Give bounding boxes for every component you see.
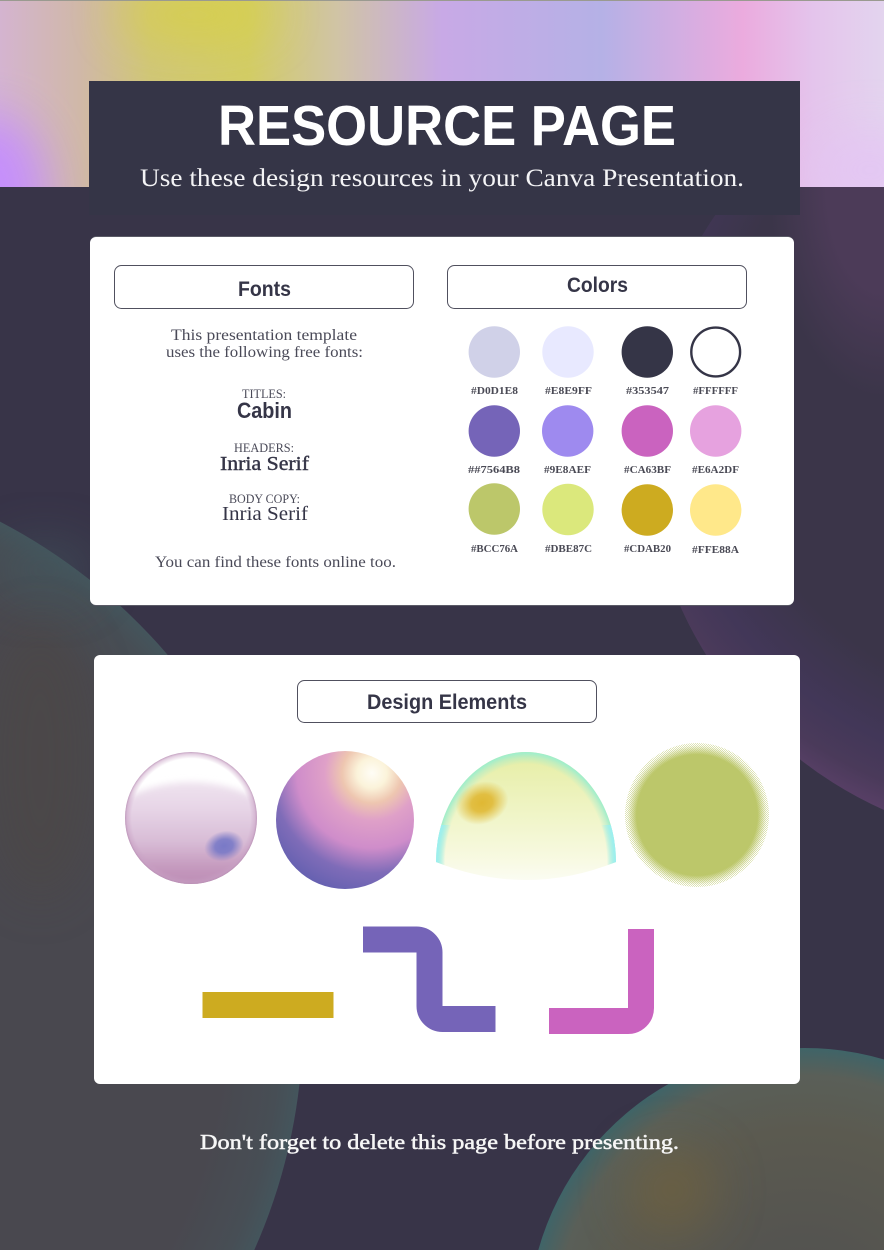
headers font bbox=[220, 441, 309, 475]
swatch: D0D1E8: #D0D1E8 bbox=[471, 385, 519, 397]
panel: fonts and colors bbox=[90, 236, 794, 606]
gradient banner bbox=[0, 0, 884, 187]
swatch: 7564B8 bbox=[468, 405, 521, 476]
background bubble: right purple bbox=[645, 74, 884, 810]
body copy font bbox=[222, 492, 308, 525]
titles font: TITLES: bbox=[242, 387, 286, 401]
swatch: FFFFFF: #FFFFFF bbox=[693, 385, 738, 397]
swatch: E6A2DF bbox=[690, 405, 741, 476]
swatch: BCC76A bbox=[469, 483, 520, 555]
design elements heading box bbox=[298, 680, 596, 722]
colors heading box bbox=[448, 266, 746, 308]
header block bbox=[89, 81, 800, 215]
body copy font: Inria Serif bbox=[222, 503, 308, 525]
background bubble: bottom right bbox=[538, 1048, 884, 1250]
swatch: 9E8AEF: #9E8AEF bbox=[544, 464, 591, 476]
swatch: E6A2DF: #E6A2DF bbox=[692, 464, 739, 476]
swatch: BCC76A: #BCC76A bbox=[471, 543, 518, 555]
fonts heading box bbox=[114, 266, 414, 308]
headers font: HEADERS: bbox=[234, 441, 294, 455]
swatch: CDAB20: #CDAB20 bbox=[624, 543, 671, 555]
element: purple zigzag line bbox=[363, 940, 496, 1019]
element: iridescent sphere bbox=[276, 751, 414, 889]
panel: design elements bbox=[91, 655, 800, 1084]
titles font: Cabin bbox=[237, 398, 292, 423]
titles font bbox=[237, 387, 292, 423]
swatch: FFFFFF bbox=[691, 328, 740, 397]
panel: colors bbox=[448, 266, 746, 556]
title: RESOURCE PAGE bbox=[218, 94, 676, 158]
swatch: CA63BF: #CA63BF bbox=[624, 464, 671, 476]
background bubble: left teal bbox=[0, 522, 303, 1250]
colors heading box: Colors bbox=[567, 274, 628, 297]
swatch: D0D1E8 bbox=[469, 326, 520, 397]
swatch: CA63BF bbox=[622, 405, 673, 476]
swatch: 7564B8: ##7564B8 bbox=[468, 464, 521, 476]
swatch: 353547: #353547 bbox=[626, 385, 670, 397]
footer note: Don't forget to delete this page before presenting. bbox=[200, 1130, 679, 1154]
element: pink corner line bbox=[549, 929, 641, 1021]
swatch: 9E8AEF bbox=[542, 405, 593, 476]
swatch: DBE87C bbox=[542, 484, 594, 555]
swatch: 353547 bbox=[622, 326, 673, 397]
fonts intro text bbox=[166, 327, 363, 361]
design elements heading box: Design Elements bbox=[367, 691, 527, 714]
headers font: Inria Serif bbox=[220, 453, 309, 475]
fonts footer text: You can find these fonts online too. bbox=[155, 554, 396, 571]
element: halftone circle bbox=[625, 743, 769, 887]
element: gold bar bbox=[202, 992, 334, 1018]
panel: fonts bbox=[114, 266, 414, 571]
swatch: DBE87C: #DBE87C bbox=[545, 543, 592, 555]
swatch: E8E9FF: #E8E9FF bbox=[545, 385, 592, 397]
swatch: E8E9FF bbox=[542, 326, 594, 397]
fonts intro text: This presentation template bbox=[171, 327, 357, 344]
element: dome bubble bbox=[436, 752, 616, 880]
swatch: FFE88A bbox=[690, 484, 741, 556]
fonts heading box: Fonts bbox=[238, 278, 291, 301]
swatch: CDAB20 bbox=[622, 484, 673, 555]
subtitle: Use these design resources in your Canva Presentation. bbox=[140, 165, 744, 192]
fonts intro text: uses the following free fonts: bbox=[166, 344, 363, 361]
body copy font: BODY COPY: bbox=[229, 492, 300, 506]
element: pearl sphere bbox=[125, 752, 257, 884]
swatch: FFE88A: #FFE88A bbox=[692, 544, 739, 556]
